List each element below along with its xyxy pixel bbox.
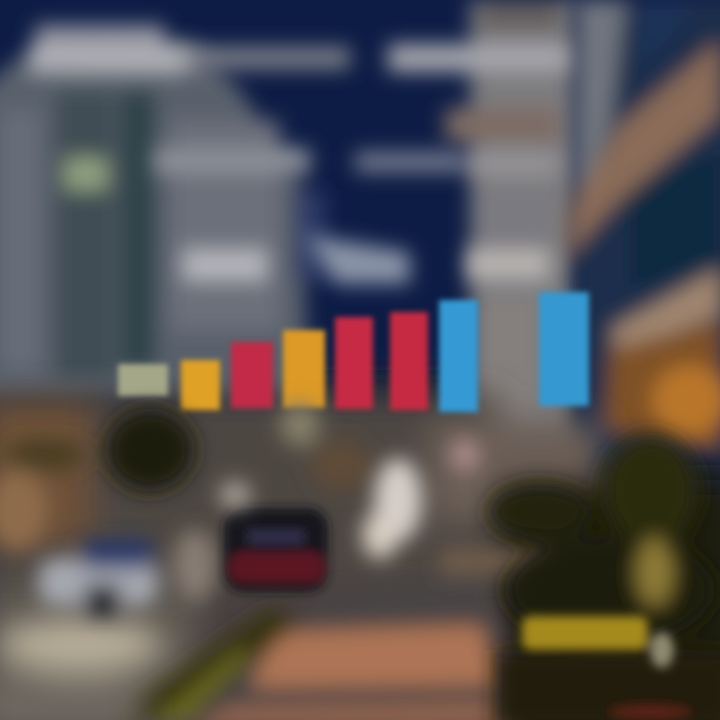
dark red car (224, 508, 328, 592)
roadside trees (0, 403, 370, 550)
white car (38, 529, 217, 615)
left pavement lights (0, 617, 165, 720)
palm plants (488, 434, 720, 720)
banner: red 2 (335, 317, 373, 409)
illuminated yellow planter (522, 616, 692, 720)
light facade bands (28, 25, 568, 284)
white glare on road (219, 439, 550, 576)
right balconies and dark windows (565, 0, 720, 460)
lower street background (0, 395, 720, 720)
centre-right tower (445, 0, 575, 460)
banner: red 3 (390, 312, 428, 410)
coloured banners (118, 292, 589, 412)
banner: yellow (181, 360, 220, 410)
banner: pale green (118, 364, 168, 396)
banner: red 1 (231, 342, 273, 408)
banner: orange (283, 330, 325, 408)
banner: blue 2 (539, 292, 589, 406)
left tower block (0, 40, 325, 400)
banner: blue 1 (439, 300, 478, 412)
night sky (0, 0, 720, 370)
road surface (110, 570, 520, 720)
